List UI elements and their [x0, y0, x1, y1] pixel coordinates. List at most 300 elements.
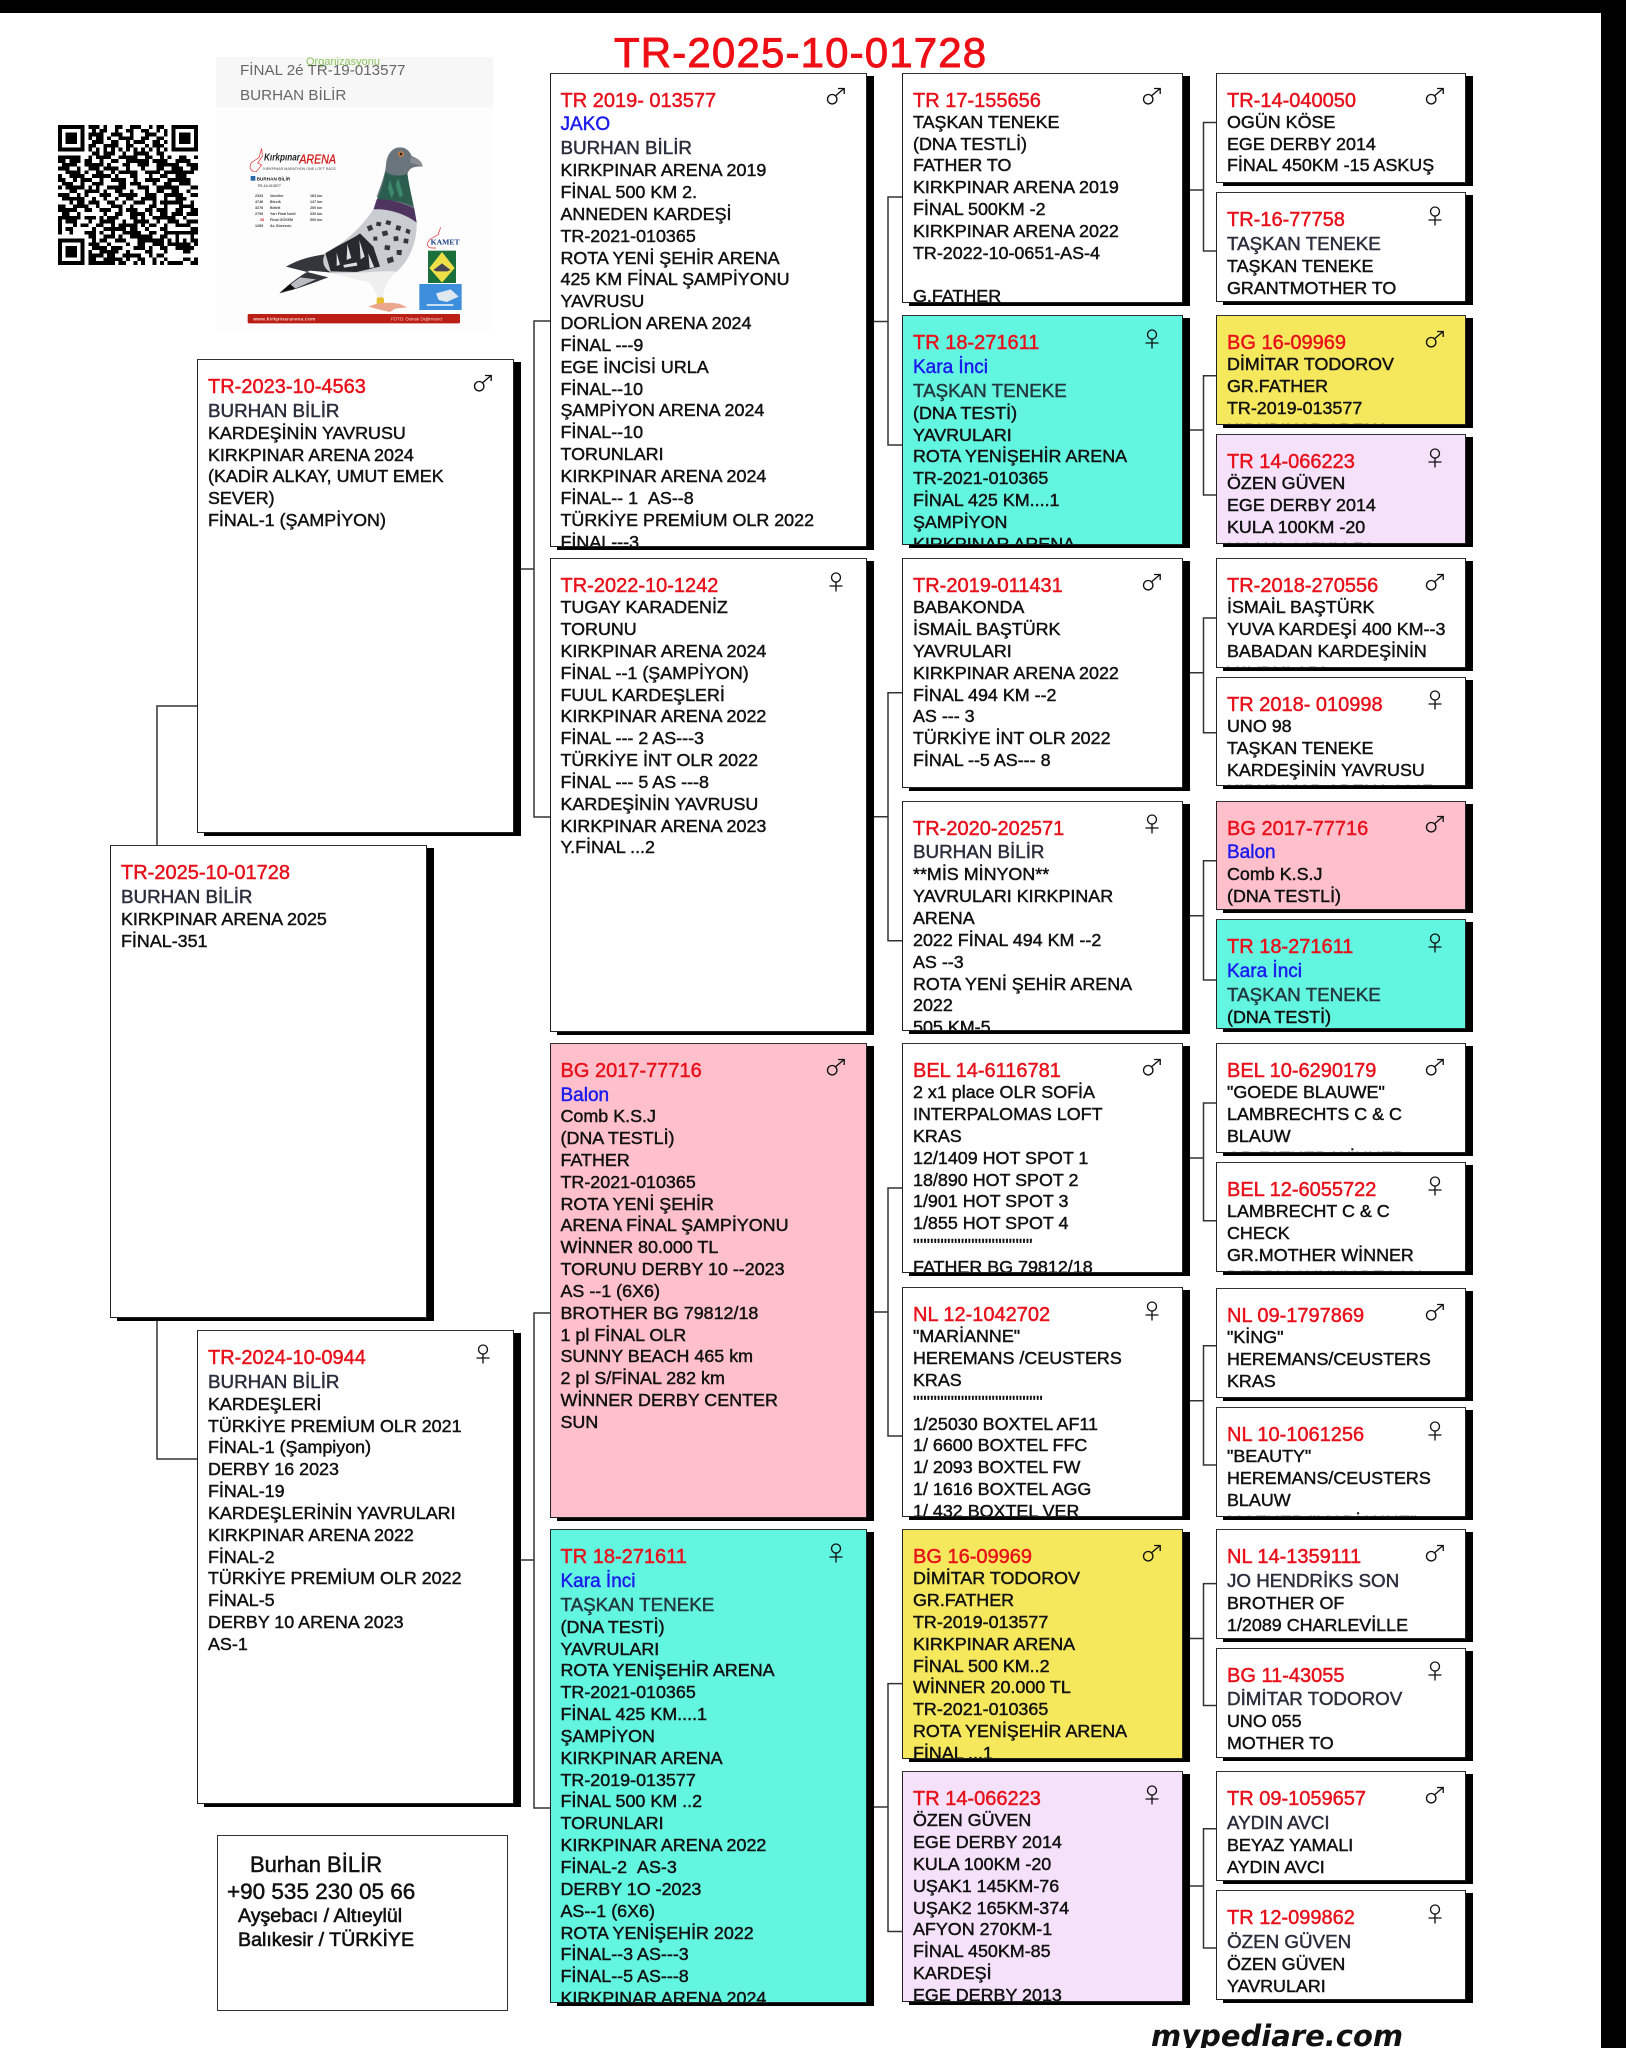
ring number: TR-2025-10-01728 — [121, 862, 290, 884]
results: Comb K.S.J — [1227, 864, 1322, 884]
results: FİNAL 494 KM --2 — [913, 685, 1057, 705]
owner: TAŞKAN TENEKE — [913, 380, 1067, 401]
address — [238, 1905, 414, 1950]
results: GR.MOTHER WİNNER — [1227, 1245, 1414, 1265]
results — [560, 597, 766, 857]
owner: DİMİTAR TODOROV — [1227, 1688, 1402, 1709]
results — [1227, 597, 1465, 685]
results: BABAKONDA — [913, 597, 1024, 617]
results: FİNAL 500 KM 2. — [560, 182, 697, 202]
panel: TR-2019-011431 — [902, 558, 1183, 788]
results: KIRKPINAR ARENA — [913, 1634, 1075, 1654]
results: FİNAL-5 — [208, 1590, 275, 1610]
pigeon name: Balon — [560, 1085, 609, 1106]
results: FİNAL 500KM -2 — [913, 199, 1046, 219]
results: SEVER) — [208, 488, 275, 508]
panel: TR 18-271611 — [1216, 919, 1466, 1029]
results: YAVRULARI KIRKPINAR — [913, 886, 1113, 906]
stats table: Biecik — [270, 200, 282, 204]
owner: TAŞKAN TENEKE — [1227, 233, 1381, 254]
results: FİNAL--5 AS---8 — [560, 1966, 689, 1986]
ring number: TR 18-271611 — [1227, 936, 1353, 958]
results: FİNAL ---9 — [560, 335, 643, 355]
pigeon name: JAKO — [560, 114, 610, 135]
results — [1227, 1446, 1465, 1534]
results: FİNAL-2 AS-3 — [560, 1857, 677, 1877]
icon: female — [476, 1344, 490, 1364]
ring number: NL 12-1042702 — [913, 1304, 1050, 1326]
caption text: FİNAL 2é TR-19-013577 — [240, 62, 405, 79]
stats table: 4746 — [255, 200, 263, 204]
panel: contact details — [217, 1835, 508, 2011]
results: KRAS — [1227, 1371, 1276, 1391]
stats table: 26 — [260, 218, 264, 222]
results — [1227, 112, 1434, 175]
results: İSMAİL BAŞTÜRK — [1227, 597, 1374, 617]
results: FİNAL 500 KM..2 — [913, 1656, 1050, 1676]
ring number: TR-14-040050 — [1227, 90, 1356, 112]
icon: female — [1424, 689, 1446, 711]
results: ARENA — [913, 908, 975, 928]
icon: male — [1424, 1784, 1446, 1806]
results: ÖZEN GÜVEN — [913, 1810, 1031, 1830]
panel: sire TR-2023-10-4563 — [197, 359, 514, 833]
results: EGE DERBY 2014 — [1227, 495, 1376, 515]
owner: TAŞKAN TENEKE — [560, 1594, 714, 1615]
panel: TR-2022-10-1242 — [550, 558, 866, 1032]
results: BROTHER BG 79812/18 — [560, 1303, 758, 1323]
results: FİNAL 425 KM....1 — [913, 490, 1060, 510]
panel: root pigeon TR-2025-10-01728 — [110, 845, 427, 1318]
ring number: BG 16-09969 — [913, 1546, 1032, 1568]
owner: BURHAN BİLİR — [560, 137, 692, 158]
results: LAMBRECHT C & C — [1227, 1201, 1390, 1221]
ring number: TR 14-066223 — [1227, 451, 1355, 473]
panel: BEL 14-6116781 — [902, 1043, 1183, 1273]
results: ROTA YENİŞEHİR 2022 — [560, 1922, 754, 1942]
logo: KIRKPINAR MARATHON ONE LOFT RACE — [263, 166, 336, 171]
results: UNO 98 — [1227, 716, 1292, 736]
results: KIRKPINAR ARENA 2024 — [560, 466, 766, 486]
website bar — [248, 314, 460, 323]
panel: TR 18-271611 — [550, 1529, 866, 2003]
owner: BURHAN BİLİR — [208, 1371, 340, 1392]
results: FİNAL --1 (ŞAMPİYON) — [560, 663, 749, 683]
logo: Kırkpınar — [264, 153, 301, 164]
icon: male — [1142, 1544, 1161, 1562]
results: TR-2022-10-0651-AS-4 — [913, 243, 1100, 263]
results: FİNAL 500 KM ..2 — [560, 1791, 702, 1811]
results: EGE DERBY 2014 — [913, 1832, 1062, 1852]
results: BLAUW — [1227, 1126, 1291, 1146]
stats table: 163 km — [310, 194, 323, 198]
results: TR-2021-010365 — [913, 1699, 1048, 1719]
icon: male — [1424, 813, 1446, 835]
results — [913, 1082, 1103, 1273]
icon: male — [826, 88, 845, 105]
results: AS --3 — [913, 952, 964, 972]
results: "KİNG" — [1227, 1327, 1283, 1347]
results: DİMİTAR TODOROV — [913, 1568, 1080, 1588]
icon: female — [1424, 1902, 1446, 1924]
results: Comb K.S.J — [560, 1106, 656, 1126]
results — [121, 909, 327, 951]
results: KIRKPINAR ARENA 2025 — [121, 909, 327, 929]
results — [1227, 1082, 1465, 1170]
results: MOTHER TO — [1227, 1733, 1334, 1753]
stats table: 147 km — [310, 200, 323, 204]
results: TUGAY KARADENİZ — [560, 597, 728, 617]
results — [1227, 1327, 1465, 1393]
results: INTERPALOMAS LOFT — [913, 1104, 1103, 1124]
results: WİNNER 20.000 TL — [913, 1677, 1071, 1697]
results: GRANTMOTHER TO — [1227, 278, 1396, 298]
results: '''''''''''''''''''''''''''''''''''''' — [913, 1392, 1043, 1412]
results: FİNAL --5 AS--- 8 — [913, 750, 1051, 770]
results: FİNAL --- 2 AS---3 — [560, 728, 704, 748]
results: 18/890 HOT SPOT 2 — [913, 1170, 1078, 1190]
ring number: BG 2017-77716 — [560, 1060, 702, 1082]
results: ROTA YENİŞEHİR ARENA — [913, 446, 1127, 466]
owner: ÖZEN GÜVEN — [1227, 1931, 1351, 1952]
results: KIRKPINAR ARENA 2019 — [560, 160, 766, 180]
results: FİNAL-351 — [121, 931, 208, 951]
results: FUUL KARDEŞLERİ — [560, 685, 725, 705]
ring number: TR-2023-10-4563 — [208, 376, 366, 398]
results — [1227, 1593, 1465, 1636]
panel: TR 12-099862 — [1216, 1890, 1466, 2000]
icon: female — [1428, 448, 1442, 468]
results: FİNAL 450KM -15 ASKUŞ — [1227, 155, 1434, 175]
panel: NL 12-1042702 — [902, 1287, 1183, 1517]
results: FİNAL 425 KM....1 — [560, 1704, 707, 1724]
ring number: NL 10-1061256 — [1227, 1424, 1364, 1446]
results: DERBY 1O -2023 — [560, 1879, 701, 1899]
icon: female — [1146, 1301, 1158, 1320]
results: KIRKPINAR ARENA 2022 — [560, 706, 766, 726]
results: KIRKPINAR ARENA 2024 — [208, 445, 414, 465]
panel: BG 2017-77716 — [1216, 801, 1466, 910]
panel: TR 17-155656 — [902, 72, 1183, 303]
caption text: BURHAN BİLİR — [240, 87, 346, 104]
results — [1227, 256, 1396, 298]
results: (DNA TESTLİ) — [913, 134, 1027, 154]
stats table: BURHAN BİLİR — [257, 176, 291, 182]
results: 1/2089 CHARLEVİLLE — [1227, 1615, 1408, 1635]
panel: TR 2018-010998 — [1216, 677, 1466, 786]
icon: male — [1142, 88, 1161, 105]
results: (KADİR ALKAY, UMUT EMEK — [208, 466, 444, 486]
results — [912, 864, 1132, 1031]
panel: TR 14-066223 — [1216, 434, 1466, 544]
website bar: FOTO: Osman Değirmenci — [391, 316, 442, 321]
results: FATHER TO — [913, 155, 1011, 175]
panel: TR-2018-270556 — [1216, 558, 1466, 668]
results: TR-2021-010365 — [560, 226, 696, 246]
results — [912, 597, 1119, 770]
results: KARDEŞLERİ — [208, 1394, 321, 1414]
results: LAMBRECHTS C & C — [1227, 1104, 1402, 1124]
results — [913, 1326, 1122, 1517]
results: "GOEDE BLAUWE" — [1227, 1082, 1385, 1102]
logo: ARENA — [299, 151, 336, 166]
icon: female — [1428, 206, 1442, 226]
results: ROTA YENİ ŞEHİR ARENA — [913, 974, 1132, 994]
results: TAŞKAN TENEKE — [913, 112, 1059, 132]
results: KIRKPINAR ARENA 2023 — [560, 816, 766, 836]
icon: female — [1424, 1660, 1446, 1682]
stats table: As Güvercin — [270, 224, 292, 228]
results: ''''''''''''''''''''''''''''''''''' — [913, 1235, 1033, 1255]
results: ŞAMPİYON ARENA 2024 — [560, 400, 764, 420]
pigeon photo — [248, 147, 462, 324]
icon: male — [474, 374, 492, 392]
results: KRAS — [913, 1126, 962, 1146]
results: FİNAL-- 1 AS--8 — [560, 488, 694, 508]
results: BROTHER OF — [1227, 1593, 1344, 1613]
results — [1227, 1201, 1465, 1289]
right black strip — [1601, 0, 1626, 2048]
stats table — [251, 176, 323, 228]
results: FİNAL 450KM-85 — [913, 1941, 1051, 1961]
ring number: TR 2019- 013577 — [560, 90, 716, 112]
stats table: Final GÜVEM — [270, 217, 293, 222]
results: DERBY 16 2023 — [208, 1459, 339, 1479]
results: (DNA TESTLİ) — [560, 1128, 674, 1148]
pigeon name: Kara İnci — [913, 357, 988, 378]
results: ARENA FİNAL ŞAMPİYONU — [560, 1215, 788, 1235]
results: (DNA TESTİ) — [1227, 1007, 1331, 1027]
results: YUVA KARDEŞİ 400 KM--3 — [1227, 619, 1445, 639]
results: 1/855 HOT SPOT 4 — [913, 1213, 1068, 1233]
results: YAVRUSU — [560, 291, 644, 311]
title: TR-2025-10-01728 — [614, 29, 987, 76]
owner: JO HENDRİKS SON — [1227, 1570, 1399, 1591]
icon: male — [1426, 330, 1444, 348]
results: AFYON 270KM-1 — [913, 1919, 1052, 1939]
results: 12/1409 HOT SPOT 1 — [913, 1148, 1088, 1168]
stats table: 3276 — [255, 206, 263, 210]
results: TR-2021-010365 — [560, 1682, 696, 1702]
results — [560, 1617, 775, 2003]
ring number: BG 2017-77716 — [1227, 818, 1368, 840]
results: SUN — [560, 1412, 598, 1432]
results: 2022 FİNAL 494 KM --2 — [913, 930, 1101, 950]
icon: male — [1142, 574, 1161, 591]
results: "BEAUTY" — [1227, 1446, 1311, 1466]
panel: TR 14-066223 — [902, 1771, 1183, 2002]
results: ŞAMPİYON — [560, 1726, 655, 1746]
panel: BG 16-09969 — [1216, 315, 1466, 425]
stats table: 2333 — [255, 194, 263, 198]
ring number: BG 11-43055 — [1227, 1665, 1344, 1687]
results: EGE DERBY 2014 — [1227, 134, 1376, 154]
results: KARDEŞİ — [913, 1963, 992, 1983]
results: TR-2021-010365 — [913, 468, 1048, 488]
icon: female — [830, 1543, 842, 1562]
results: TORUNU — [560, 619, 637, 639]
ring number: BG 16-09969 — [1227, 332, 1346, 354]
results — [208, 423, 444, 530]
results: KARDEŞİNİN YAVRUSU — [208, 423, 406, 443]
results: TÜRKİYE PREMİUM OLR 2022 — [208, 1568, 462, 1588]
stats table: 330 km — [310, 212, 323, 216]
results: KRAS — [913, 1370, 962, 1390]
stats table: Yarı Final İzmit — [270, 211, 296, 216]
results: 1/ 6600 BOXTEL FFC — [913, 1435, 1087, 1455]
stats table: 2795 — [255, 212, 263, 216]
results: WİNNER 80.000 TL — [560, 1237, 718, 1257]
results: (DNA TESTİ) — [560, 1617, 665, 1637]
ring number: BEL 12-6055722 — [1227, 1179, 1376, 1201]
owner: BURHAN BİLİR — [121, 886, 252, 907]
results: TÜRKİYE PREMİUM OLR 2021 — [208, 1416, 462, 1436]
icon: female — [1424, 932, 1446, 954]
results: 1/ 2093 BOXTEL FW — [913, 1457, 1080, 1477]
panel: TR-2020-202571 — [902, 801, 1183, 1031]
results: FİNAL--10 — [560, 422, 643, 442]
results: CHECK — [1227, 1223, 1290, 1243]
kamet logo — [428, 227, 460, 248]
ring number: NL 09-1797869 — [1227, 1305, 1364, 1327]
panel: TR-16-77758 — [1216, 192, 1466, 302]
results: DİMİTAR TODOROV — [1227, 354, 1394, 374]
top black bar — [0, 0, 1626, 13]
icon: female — [1424, 1174, 1446, 1196]
results: TORUNLARI — [560, 444, 664, 464]
results: AS --1 (6X6) — [560, 1281, 660, 1301]
results — [208, 1394, 462, 1654]
results: AS --- 3 — [913, 706, 975, 726]
results: DORLİON ARENA 2024 — [560, 313, 751, 333]
blue sponsor box — [419, 284, 462, 310]
panel: TR 18-271611 — [902, 315, 1183, 545]
results: 2 pl S/FİNAL 282 km — [560, 1368, 725, 1388]
panel: BG 11-43055 — [1216, 1648, 1466, 1758]
kamet logo: KAMET — [431, 238, 460, 247]
results: DERBY 10 ARENA 2023 — [208, 1612, 404, 1632]
results — [1227, 473, 1465, 561]
stats table: Bitlett — [270, 206, 281, 210]
ring number: TR 14-066223 — [913, 1788, 1041, 1810]
icon: female — [1424, 1420, 1446, 1442]
panel: NL 10-1061256 — [1216, 1407, 1466, 1517]
ring number: TR 2018- 010998 — [1227, 694, 1383, 716]
results: FİNAL--10 — [560, 379, 643, 399]
ring number: TR 18-271611 — [913, 332, 1039, 354]
results: HEREMANS/CEUSTERS — [1227, 1349, 1431, 1369]
results — [912, 1810, 1069, 2002]
caption text — [240, 62, 405, 104]
results: FATHER — [560, 1150, 630, 1170]
owner: AYDIN AVCI — [1227, 1812, 1330, 1833]
results — [560, 1106, 788, 1432]
results: AS--1 (6X6) — [560, 1901, 655, 1921]
results: TORUNU DERBY 10 --2023 — [560, 1259, 785, 1279]
results: KIRKPINAR ARENA 2022 — [913, 663, 1119, 683]
results — [560, 160, 814, 546]
results: FİNAL-2 — [208, 1547, 275, 1567]
results — [1227, 1835, 1465, 1878]
icon: female — [1146, 814, 1158, 834]
ring number: TR-2022-10-1242 — [560, 575, 718, 597]
results: TORUNLARI — [560, 1813, 664, 1833]
pigeon — [279, 147, 423, 312]
icon: male — [1424, 1542, 1446, 1564]
panel: BEL 10-6290179 — [1216, 1043, 1466, 1153]
results: KIRKPINAR ARENA 2022 — [913, 221, 1119, 241]
results: UNO 055 — [1227, 1711, 1302, 1731]
results: İSMAİL BAŞTÜRK — [913, 619, 1060, 639]
results — [912, 1568, 1128, 1759]
results: (DNA TESTLİ) — [1227, 886, 1341, 906]
pigeon name: Kara İnci — [560, 1571, 635, 1592]
results: 425 KM FİNAL ŞAMPİYONU — [560, 269, 790, 289]
results: YAVRULARI — [913, 425, 1012, 445]
results: YAVRULARI — [1227, 1976, 1326, 1996]
results: 1/ 1616 BOXTEL AGG — [913, 1479, 1091, 1499]
address: Ayşebacı / Altıeylül — [238, 1905, 402, 1927]
ring number: TR-2020-202571 — [913, 818, 1064, 840]
results: TAŞKAN TENEKE — [1227, 256, 1373, 276]
ring number: TR-16-77758 — [1227, 209, 1345, 231]
pigeon name: Kara İnci — [1227, 961, 1302, 982]
results: 2 x1 place OLR SOFİA — [913, 1082, 1095, 1102]
results: BABADAN KARDEŞİNİN — [1227, 641, 1427, 661]
results — [1227, 1954, 1465, 1997]
owner: BURHAN BİLİR — [913, 841, 1044, 862]
results: KIRKPINAR ARENA 2022 — [560, 1835, 766, 1855]
results: KULA 100KM -20 — [913, 1854, 1051, 1874]
owner name: Burhan BİLİR — [250, 1852, 382, 1877]
results: HEREMANS /CEUSTERS — [913, 1348, 1122, 1368]
website bar: www.kirkpinararena.com — [252, 316, 316, 321]
icon: male — [826, 1058, 845, 1076]
results: TÜRKİYE İNT OLR 2022 — [560, 750, 758, 770]
results: KARDEŞİNİN YAVRUSU — [560, 794, 758, 814]
results: UŞAK2 165KM-374 — [913, 1898, 1069, 1918]
ring number: TR 17-155656 — [913, 90, 1041, 112]
photo caption banner — [216, 57, 493, 107]
results: KIRKPINAR ARENA — [560, 1748, 723, 1768]
stats table: TR-19-013577 — [257, 184, 281, 188]
results: SUNNY BEACH 465 km — [560, 1346, 753, 1366]
phone: +90 535 230 05 66 — [227, 1879, 415, 1904]
stats table: 1289 — [255, 224, 263, 228]
results — [913, 112, 1119, 303]
results: FİNAL-1 (Şampiyon) — [208, 1437, 371, 1457]
results: GR.FATHER — [1227, 376, 1328, 396]
panel: dam TR-2024-10-0944 — [197, 1330, 514, 1804]
icon: QR code — [58, 125, 198, 265]
owner: BURHAN BİLİR — [208, 400, 340, 421]
address: Balıkesir / TÜRKİYE — [238, 1928, 414, 1950]
panel: BG 16-09969 — [902, 1529, 1183, 1759]
results: FİNAL--3 AS---3 — [560, 1944, 689, 1964]
results — [1227, 716, 1465, 803]
results — [1227, 864, 1465, 908]
ring number: TR-2018-270556 — [1227, 575, 1378, 597]
icon: female — [830, 572, 842, 592]
icon: male — [1424, 570, 1446, 592]
results: YAVRULARI — [913, 641, 1012, 661]
results: WİNNER DERBY CENTER — [560, 1390, 778, 1410]
ring number: TR-2019-011431 — [913, 575, 1063, 597]
results: GR.FATHER — [913, 1590, 1014, 1610]
panel: TR-14-040050 — [1216, 72, 1466, 182]
panel: BG 2017-77716 — [550, 1043, 866, 1518]
results: KULA 100KM -20 — [1227, 517, 1365, 537]
